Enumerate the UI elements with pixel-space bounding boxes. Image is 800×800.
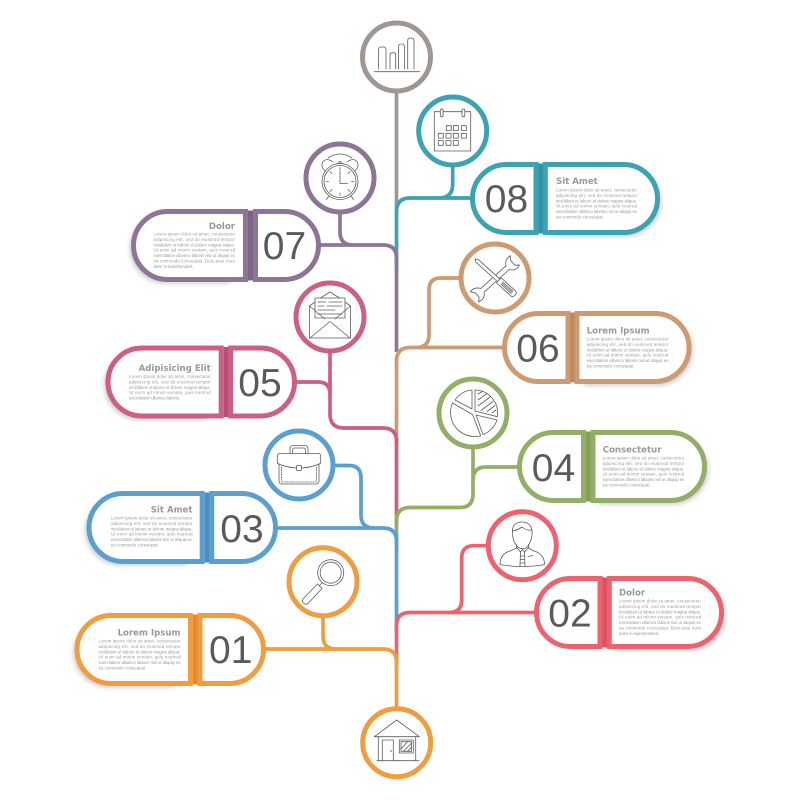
icon: businessman [500, 522, 544, 566]
pill 06 [504, 312, 692, 384]
text block 06 [587, 326, 669, 368]
text block 05: Ut enim ad minim veniam, quis nostrud [129, 390, 211, 395]
text block 03: Ut enim ad minim veniam, quis nostrud [111, 532, 193, 537]
text block 08: exercitation ullamco laboris nisi ut aliquip ex [556, 209, 638, 214]
text block 04: adipiscing elit, sed do eiusmod tempor [603, 461, 685, 466]
text block 05: Adipisicing Elit [139, 364, 211, 374]
node: 07 alarm clock circle [306, 144, 374, 212]
number 01: 01 [209, 629, 252, 672]
number 08: 08 [485, 178, 528, 221]
text block 03: ea commodo consequat. [111, 542, 159, 548]
text block 06: Ut enim ad minim veniam, quis nostrud [587, 353, 669, 358]
text block 05: exercitation ullamco laboris. [129, 396, 180, 401]
text block 07: Ut enim ad minim veniam, quis nostrud [154, 248, 236, 253]
text block 04: ea commodo consequat. [603, 482, 651, 488]
text block 08: ea commodo consequat. [556, 214, 604, 220]
text block 01: Lorem Ipsum [118, 628, 181, 638]
text block 02: Ut enim ad minim veniam, quis nostrud [619, 615, 702, 620]
text block 04 [603, 446, 685, 488]
text block 07: exercitation ullamco laboris nisi ut aliquip ex [154, 253, 236, 258]
node: 05 envelope circle [296, 283, 364, 351]
connector tree [265, 90, 535, 710]
text block 05: incididunt ut labore et dolore magna aliqua. [129, 385, 211, 390]
connector: 06 tan [396, 278, 503, 445]
node: 01 magnifier circle [289, 548, 357, 616]
node: 08 calendar circle [419, 97, 487, 165]
text block 06: ea commodo consequat. [587, 364, 635, 368]
connector: 08 teal [396, 165, 472, 265]
pill 01 [74, 614, 264, 686]
text block 04: Consectetur [603, 446, 662, 456]
number 05: 05 [238, 362, 282, 405]
text block 02: ea commodo consequat. Duis aute irure [619, 626, 702, 630]
connector: 02 red [396, 546, 535, 666]
node: 03 briefcase circle [265, 431, 333, 499]
text block 04: exercitation ullamco laboris nisi ut aliquip ex [603, 477, 685, 482]
icon: pie chart [451, 390, 498, 437]
text block 06: Lorem Ipsum [587, 326, 650, 336]
text block 08: Ut enim ad minim veniam, quis nostrud [556, 204, 638, 209]
text block 07 [154, 222, 236, 269]
icon: bar chart [374, 38, 420, 72]
text block 02: Dolor [619, 588, 646, 598]
text block 01 [98, 628, 181, 670]
pill 08 [472, 164, 660, 236]
text block 07: incididunt ut labore et dolore magna aliqua. [154, 242, 235, 247]
icon: house [374, 720, 419, 761]
text block 06: adipiscing elit, sed do eiusmod tempor [587, 342, 669, 347]
text block 01: ea commodo consequat. [98, 666, 146, 670]
text block 08: incididunt ut labore et dolore magna aliqua. [556, 198, 637, 203]
text block 03: exercitation ullamco laboris nisi ut aliquip ex [111, 537, 193, 542]
node: bottom home circle [363, 709, 431, 777]
text block 03: adipiscing elit, sed do eiusmod tempor [111, 521, 193, 526]
text block 07: ea commodo consequat. Duis aute irure [154, 258, 236, 264]
node: top chart circle [362, 23, 430, 91]
number 02: 02 [548, 592, 592, 636]
text block 02 [619, 588, 702, 636]
text block 08: Lorem ipsum dolor sit amet, consectetur [556, 188, 638, 192]
icon: magnifying glass [302, 560, 344, 604]
connector: top grey trunk [395, 90, 398, 212]
text block 02: exercitation ullamco laboris nisi ut aliquip ex [619, 620, 702, 625]
text block 01: Ut enim ad minim veniam, quis nostrud [98, 655, 181, 660]
pill 07 [130, 210, 318, 282]
text block 05: adipiscing elit, sed do eiusmod tempor [129, 379, 211, 384]
text block 03: Sit Amet [151, 506, 192, 516]
connector: 03 blue [277, 466, 396, 632]
icon: crossed screwdriver and wrench [470, 255, 520, 302]
icon: calendar [434, 109, 471, 151]
text block 07: dolor in reprehenderit. [154, 264, 194, 269]
text block 02: Lorem ipsum dolor sit amet, consectetur [619, 598, 702, 604]
text block 04: incididunt ut labore et dolore magna aliqua. [603, 466, 684, 471]
text block 05 [129, 364, 211, 401]
text block 03: Lorem ipsum dolor sit amet, consectetur [111, 516, 193, 520]
number 06: 06 [516, 328, 560, 370]
text block 08: Sit Amet [556, 177, 598, 187]
text block 08 [556, 177, 638, 220]
text block 02: adipiscing elit, sed do eiusmod tempor [619, 604, 702, 609]
text block 01: exercitation ullamco laboris nisi ut aliquip ex [98, 660, 181, 665]
text block 06: exercitation ullamco laboris nisi ut aliquip ex [587, 358, 669, 363]
text block 04: Lorem ipsum dolor sit amet, consectetur [603, 456, 685, 460]
text block 01: adipiscing elit, sed do eiusmod tempor [98, 644, 181, 649]
node: 02 person circle [488, 512, 556, 580]
node: 04 pie chart circle [439, 379, 507, 447]
text block 04: Ut enim ad minim veniam, quis nostrud [603, 472, 685, 477]
pill 05 [105, 347, 294, 419]
connector: 04 green [396, 447, 518, 545]
pill 03 [86, 492, 276, 564]
pill 04 [520, 432, 708, 504]
text block 08: adipiscing elit, sed do eiusmod tempor [556, 193, 638, 198]
connector: 05 pink [296, 350, 396, 525]
text block 07: Dolor [209, 222, 236, 232]
icon: alarm clock [322, 154, 358, 200]
text block 07: Lorem ipsum dolor sit amet, consectetur [154, 232, 236, 236]
text block 01: incididunt ut labore et dolore magna aliqua. [98, 649, 180, 654]
node: 06 tools circle [461, 244, 529, 312]
text block 02: incididunt ut labore et dolore magna aliqua. [619, 609, 701, 614]
number 04: 04 [532, 447, 575, 490]
number 07: 07 [263, 225, 306, 268]
text block 05: Lorem ipsum dolor sit amet, consectetur [129, 374, 211, 379]
connector: 07 purple [320, 212, 396, 352]
icon: briefcase [277, 446, 321, 484]
icon: open envelope [310, 292, 350, 338]
text block 03 [111, 506, 193, 548]
text block 01: Lorem ipsum dolor sit amet, consectetur [98, 638, 181, 644]
connector: 01 orange [265, 616, 396, 710]
text block 02: dolor in reprehenderit. [619, 631, 659, 636]
text block 06: incididunt ut labore et dolore magna aliqua. [587, 347, 668, 352]
text block 06: Lorem ipsum dolor sit amet, consectetur [587, 336, 669, 342]
text block 03: incididunt ut labore et dolore magna aliqua. [111, 526, 192, 531]
text block 07: adipiscing elit, sed do eiusmod tempor [154, 237, 236, 242]
number 03: 03 [220, 508, 264, 551]
pill 02 [536, 578, 724, 650]
